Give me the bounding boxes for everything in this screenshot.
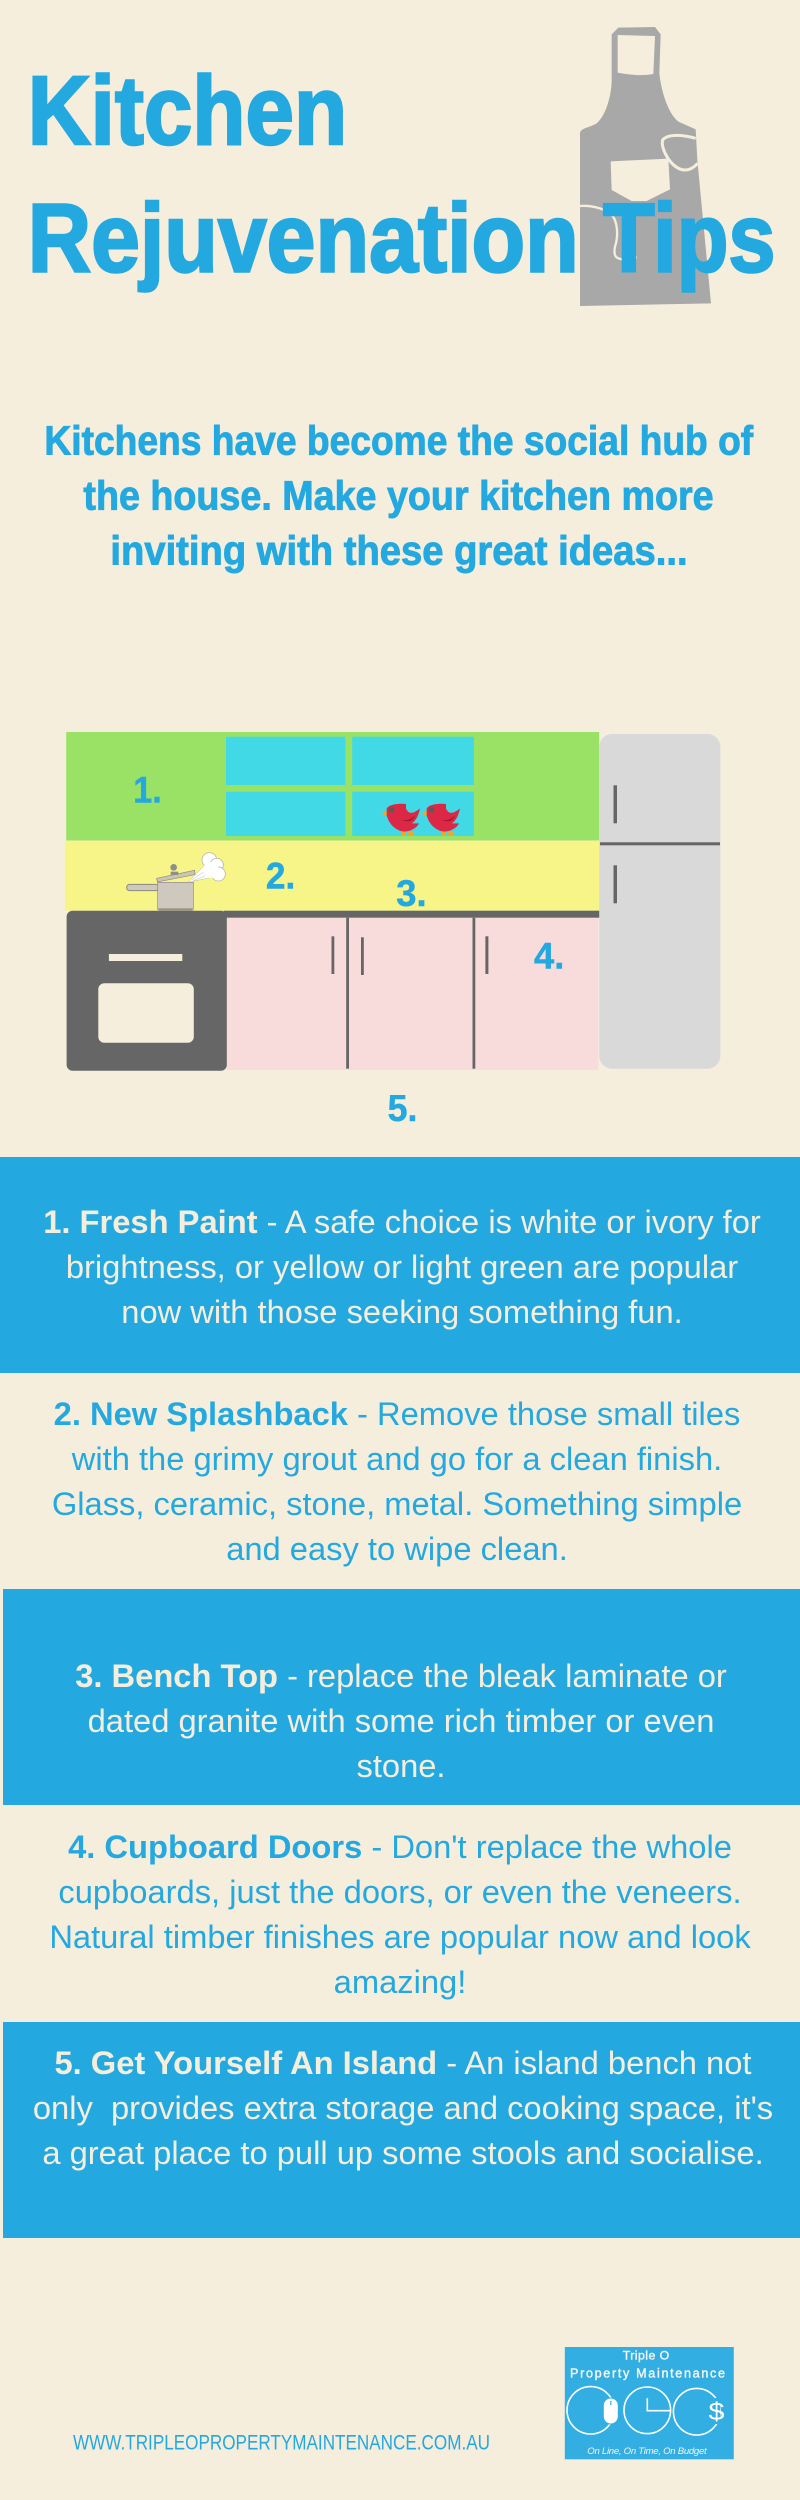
icon: red birds	[381, 804, 460, 836]
tip 3 text: dated granite with some rich timber or even	[88, 1702, 714, 1739]
header graphic with apron and title	[28, 27, 776, 574]
oven	[67, 911, 227, 1071]
yellow splashback	[65, 841, 599, 911]
tip 2 text: Glass, ceramic, stone, metal. Something simple	[52, 1485, 742, 1522]
panel: tip 5 background	[3, 2022, 800, 2238]
tip 5 text: 5. Get Yourself An Island - An island bench not	[54, 2044, 752, 2081]
panel: tip 3 background	[3, 1589, 800, 1805]
diagram numbers	[133, 770, 564, 1129]
window	[226, 737, 474, 836]
icon: dollar in circle: $	[708, 2398, 725, 2426]
tip 1 text: 1. Fresh Paint - A safe choice is white or ivory for	[43, 1203, 761, 1240]
logo: Triple O Property Maintenance: On Line, On Time, On Budget	[587, 2446, 707, 2457]
fridge	[599, 734, 720, 1069]
bench top	[224, 911, 600, 918]
tip 3 text	[75, 1657, 727, 1784]
panel: tip 1 background	[0, 1157, 800, 1373]
icon: steaming pot	[127, 853, 225, 911]
tip 2 text: 2. New Splashback - Remove those small tiles	[54, 1395, 740, 1432]
title: Rejuvenation	[28, 184, 579, 292]
tip 4 text: amazing!	[334, 1963, 466, 2000]
diagram numbers: 2.	[266, 855, 295, 896]
title: Tips	[603, 184, 776, 292]
tip 2 text: and easy to wipe clean.	[226, 1530, 568, 1567]
subtitle: inviting with these great ideas...	[110, 528, 688, 574]
footer graphic	[73, 2347, 734, 2460]
tip 4 text: 4. Cupboard Doors - Don't replace the whole	[68, 1828, 732, 1865]
diagram numbers: 5.	[388, 1088, 417, 1129]
tip 2 text: with the grimy grout and go for a clean finish.	[72, 1440, 722, 1477]
tip 4 text: cupboards, just the doors, or even the veneers.	[58, 1873, 742, 1910]
tip 1 text: brightness, or yellow or light green are popular	[66, 1248, 738, 1285]
icon: clock in circle	[624, 2387, 671, 2434]
icon: apron	[580, 27, 711, 306]
title: Kitchen	[28, 56, 347, 165]
tip 2 text	[52, 1395, 742, 1567]
subtitle: the house. Make your kitchen more	[83, 473, 714, 519]
icon: dollar in circle	[673, 2388, 725, 2435]
tip 1 text	[43, 1203, 761, 1330]
logo: Triple O Property Maintenance: Triple O	[623, 2348, 669, 2362]
tip 1 text: now with those seeking something fun.	[121, 1293, 683, 1330]
tip 4 text: Natural timber finishes are popular now and look	[49, 1918, 751, 1955]
diagram numbers: 1.	[133, 770, 162, 811]
tip 5 text: a great place to pull up some stools and socialise.	[42, 2134, 764, 2171]
logo: Triple O Property Maintenance: Property Maintenance	[570, 2366, 725, 2380]
subtitle	[44, 418, 754, 574]
logo: Triple O Property Maintenance	[565, 2347, 734, 2459]
website url: WWW.TRIPLEOPROPERTYMAINTENANCE.COM.AU	[73, 2430, 490, 2454]
tip 5 text	[33, 2044, 773, 2171]
icon: mouse in circle	[567, 2387, 618, 2434]
subtitle: Kitchens have become the social hub of	[44, 418, 754, 464]
title	[28, 56, 775, 292]
tip 5 text: only provides extra storage and cooking space, it's	[33, 2089, 773, 2126]
tip 3 text: stone.	[356, 1747, 446, 1784]
diagram numbers: 4.	[534, 936, 564, 977]
diagram numbers: 3.	[396, 873, 427, 914]
tip 4 text	[49, 1828, 751, 2000]
green painted wall	[66, 732, 599, 840]
kitchen illustration	[64, 732, 720, 1129]
tip 3 text: 3. Bench Top - replace the bleak laminate or	[75, 1657, 727, 1694]
cupboards	[227, 918, 598, 1070]
